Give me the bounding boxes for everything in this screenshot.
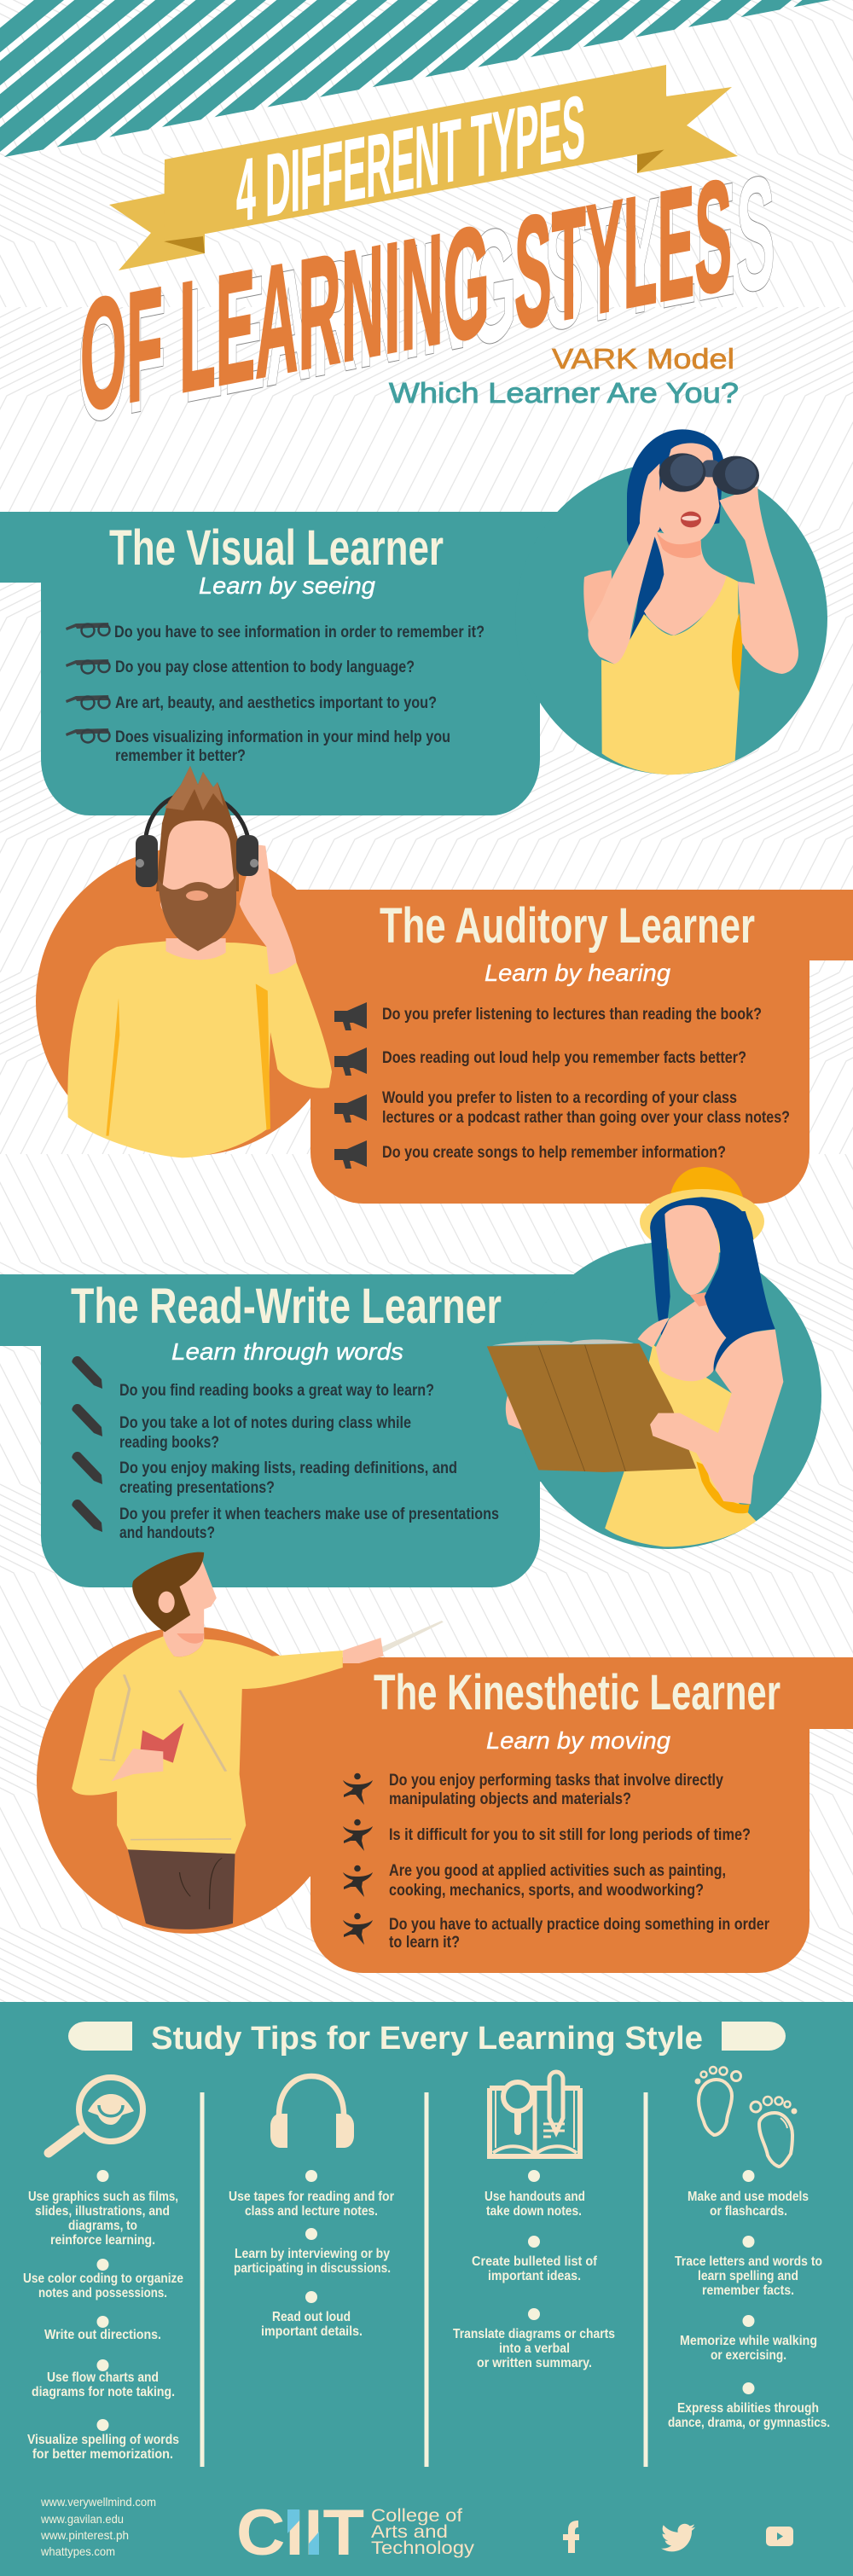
column: read-write tips: important ideas. — [488, 2269, 581, 2283]
icon: youtube — [766, 2527, 793, 2546]
column: read-write tips: or written summary. — [477, 2356, 592, 2370]
column: auditory tips: class and lecture notes. — [245, 2204, 378, 2219]
icon: megaphone 3 — [334, 1094, 367, 1123]
column: kinesthetic tips: learn spelling and — [698, 2269, 798, 2283]
column: read-write tips: Translate diagrams or charts — [453, 2327, 615, 2341]
question 1: Do you find reading books a great way to learn? — [119, 1382, 434, 1400]
question 4: to learn it? — [389, 1934, 460, 1952]
column: kinesthetic tips — [668, 2170, 830, 2430]
question 4 — [119, 1506, 499, 1542]
question 4 — [389, 1916, 770, 1952]
logo: CIIT College of Arts and Technology: CIIT — [236, 2497, 364, 2569]
question 2: Is it difficult for you to sit still for long periods of time? — [389, 1826, 751, 1844]
column: visual tips: for better memorization. — [32, 2447, 173, 2462]
illustration: woman reading a book — [487, 1167, 783, 1546]
icon: runner 2 — [343, 1819, 373, 1851]
column: read-write tips: Create bulleted list of — [472, 2254, 598, 2269]
question 3 — [119, 1459, 457, 1497]
question 2: Do you take a lot of notes during class while — [119, 1414, 411, 1432]
question 3: Would you prefer to listen to a recording of your class — [382, 1089, 737, 1107]
question 3: Do you enjoy making lists, reading definitions, and — [119, 1459, 457, 1477]
question 4: remember it better? — [115, 747, 246, 765]
column: read-write tips — [453, 2170, 615, 2370]
sources list: www.gavilan.edu — [40, 2512, 124, 2526]
column: read-write tips: take down notes. — [486, 2204, 582, 2219]
question 4: and handouts? — [119, 1524, 215, 1542]
question 3: cooking, mechanics, sports, and woodworking? — [389, 1882, 704, 1900]
heading: study tips pill left — [68, 2022, 132, 2051]
question 4: Do you have to actually practice doing something in order — [389, 1916, 770, 1934]
icon: runner 1 — [343, 1773, 373, 1805]
column: visual tips: Visualize spelling of words — [27, 2433, 179, 2447]
sources list: whattypes.com — [40, 2544, 115, 2558]
panel: read-write learner — [0, 1242, 821, 1587]
heading: the visual learner: The Visual Learner — [109, 520, 444, 576]
question 3: Are art, beauty, and aesthetics important to you? — [115, 694, 437, 712]
title: of learning styles — [80, 146, 732, 445]
illustration: woman with binoculars — [583, 429, 798, 775]
panel: kinesthetic learner — [37, 1627, 853, 1973]
icon: glasses 1 — [66, 623, 109, 636]
icon: magnifier with eye — [49, 2078, 143, 2153]
question 1: Do you prefer listening to lectures than reading the book? — [382, 1006, 762, 1024]
decorative teal diagonal stripes — [0, 0, 833, 171]
icon: glasses 3 — [66, 695, 109, 710]
subheading: learn through words: Learn through words — [171, 1338, 403, 1365]
question 1: Do you enjoy performing tasks that involve directly — [389, 1772, 723, 1790]
question 4: Does visualizing information in your mind help you — [115, 728, 450, 746]
heading: the read-write learner: The Read-Write Learner — [71, 1279, 502, 1334]
column: visual tips: diagrams, to — [68, 2219, 137, 2233]
icon: footprints — [694, 2067, 797, 2167]
column: visual tips — [23, 2170, 183, 2462]
column: read-write tips: into a verbal — [499, 2341, 570, 2356]
column: kinesthetic tips: Trace letters and words to — [675, 2254, 822, 2269]
question 1: manipulating objects and materials? — [389, 1790, 631, 1808]
icon: runner 4 — [343, 1913, 373, 1945]
subheading: learn by seeing: Learn by seeing — [199, 572, 375, 599]
icon: glasses 4 — [66, 728, 109, 742]
column: auditory tips: Learn by interviewing or by — [235, 2247, 390, 2261]
illustration: man with headphones — [67, 766, 332, 1157]
column: kinesthetic tips: or exercising. — [711, 2348, 786, 2363]
sources list: www.verywellmind.com — [40, 2495, 156, 2509]
icon: twitter — [661, 2524, 695, 2551]
icon: book with magnifier and pencil — [490, 2072, 580, 2158]
icon: pencil 1 — [72, 1356, 102, 1389]
column: kinesthetic tips: remember facts. — [702, 2283, 794, 2298]
question 3 — [382, 1089, 790, 1127]
logo: CIIT College of Arts and Technology: Arts and — [371, 2522, 448, 2542]
question 3: lectures or a podcast rather than going over your class notes? — [382, 1109, 790, 1127]
column: visual tips: Write out directions. — [44, 2328, 161, 2342]
logo: CIIT College of Arts and Technology — [236, 2497, 475, 2569]
question 3: creating presentations? — [119, 1479, 275, 1497]
question 2: Do you pay close attention to body language? — [115, 659, 415, 676]
sources list — [40, 2495, 156, 2558]
column: visual tips: Use flow charts and — [47, 2370, 159, 2385]
subheading: learn by moving: Learn by moving — [486, 1727, 670, 1754]
logo: CIIT College of Arts and Technology: College of — [371, 2506, 462, 2526]
question 2 — [119, 1414, 411, 1452]
icon: pencil 2 — [72, 1404, 102, 1436]
column: auditory tips: participating in discussions. — [234, 2261, 391, 2276]
icon: megaphone 1 — [334, 1002, 367, 1030]
heading: study tips: Study Tips for Every Learning Style — [151, 2021, 703, 2057]
panel: study tips — [0, 2002, 853, 2576]
question 2: reading books? — [119, 1434, 219, 1452]
icon: megaphone 2 — [334, 1047, 367, 1076]
icon: pencil 4 — [72, 1500, 102, 1532]
icon: pencil 3 — [72, 1452, 102, 1484]
column: visual tips: Use color coding to organize — [23, 2271, 183, 2286]
ribbon banner — [109, 65, 738, 270]
question 4 — [115, 728, 450, 765]
question 1: Do you have to see information in order to remember it? — [114, 624, 485, 641]
column: visual tips: slides, illustrations, and — [35, 2204, 170, 2219]
icon: headphones — [270, 2076, 354, 2148]
column: read-write tips: Use handouts and — [485, 2190, 585, 2204]
column: visual tips: reinforce learning. — [50, 2233, 155, 2248]
column: auditory tips — [229, 2170, 394, 2339]
heading: study tips pill right — [722, 2022, 786, 2051]
illustration: man with pointer and book — [72, 1552, 444, 1929]
column: kinesthetic tips: Memorize while walking — [680, 2334, 817, 2348]
subtitle: which learner are you: Which Learner Are You? — [389, 377, 739, 409]
column: auditory tips: Use tapes for reading and for — [229, 2190, 394, 2204]
sources list: www.pinterest.ph — [40, 2528, 129, 2542]
logo: CIIT College of Arts and Technology: Technology — [371, 2538, 475, 2558]
column: visual tips: notes and possessions. — [38, 2286, 167, 2300]
icon: megaphone 4 — [334, 1140, 367, 1169]
subheading: learn by hearing: Learn by hearing — [485, 960, 670, 986]
panel: visual learner — [0, 462, 827, 815]
question 3: Are you good at applied activities such as painting, — [389, 1862, 726, 1880]
question 4: Do you prefer it when teachers make use of presentations — [119, 1506, 499, 1523]
question 2: Does reading out loud help you remember facts better? — [382, 1049, 746, 1067]
icon: facebook — [563, 2521, 579, 2553]
column: kinesthetic tips: Make and use models — [688, 2190, 809, 2204]
column: kinesthetic tips: or flashcards. — [710, 2204, 787, 2219]
column: visual tips: diagrams for note taking. — [32, 2385, 175, 2399]
subtitle: VARK model: VARK Model — [552, 343, 734, 374]
column: auditory tips: important details. — [261, 2324, 363, 2339]
icon: glasses 2 — [66, 659, 109, 674]
column: auditory tips: Read out loud — [272, 2310, 351, 2324]
question 3 — [389, 1862, 726, 1900]
question 4: Do you create songs to help remember information? — [382, 1144, 726, 1162]
column: visual tips: Use graphics such as films, — [28, 2190, 178, 2204]
icon: runner 3 — [343, 1865, 373, 1897]
panel: auditory learner — [36, 847, 853, 1204]
question 1 — [389, 1772, 723, 1808]
column: kinesthetic tips: Express abilities through — [677, 2401, 819, 2416]
